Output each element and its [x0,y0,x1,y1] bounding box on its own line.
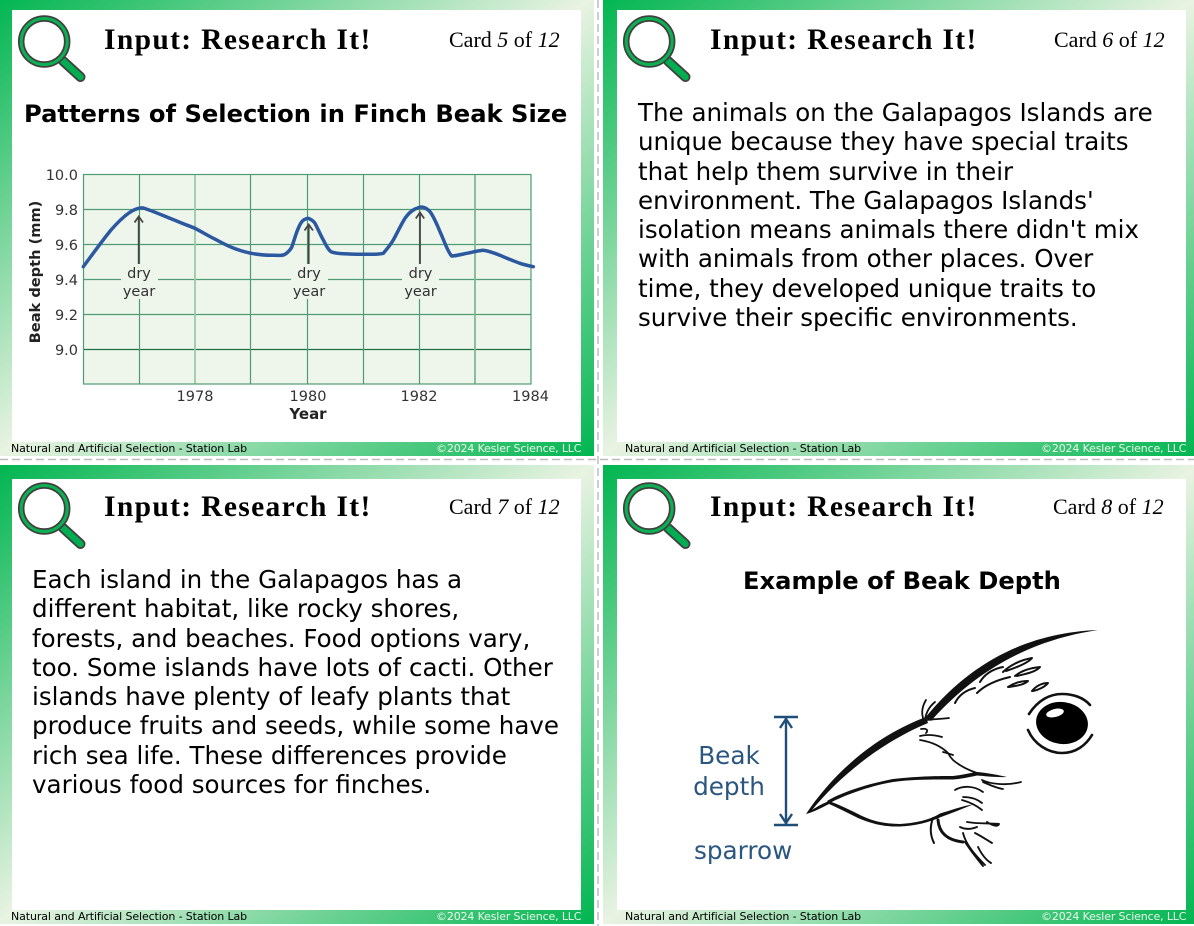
footer right card 6: ©2024 Kesler Science, LLC [1041,442,1186,455]
footer left card 7: Natural and Artificial Selection - Station Lab [11,910,247,923]
dry year labels: dry [127,266,151,282]
heading card 5: Input: Research It! [104,24,372,56]
body text card 7: too. Some islands have lots of cacti. Other [32,653,553,682]
measure labels: sparrow [694,836,792,865]
beak depth measure [774,717,798,825]
card number 5: Card 5 of 12 [449,27,560,52]
dry year label masks [121,264,439,299]
heading card 8: Input: Research It! [710,491,978,523]
body text card 6 [638,98,1153,332]
dry year arrows [134,212,424,264]
dry year labels: year [404,284,437,300]
y axis labels: 9.0 [55,343,78,359]
y axis labels: 10.0 [46,168,78,184]
body text card 7: various food sources for finches. [32,770,431,799]
x axis labels: 1982 [401,389,437,405]
bird feathers [920,658,1048,866]
body text card 7: different habitat, like rocky shores, [32,594,459,623]
body text card 7: produce fruits and seeds, while some have [32,711,559,740]
body text card 7: Each island in the Galapagos has a [32,565,462,594]
diagram title: Example of Beak Depth [743,567,1061,595]
body text card 7: rich sea life. These differences provide [32,740,507,770]
line chart: finch beak depth by year [27,168,549,423]
body text card 7: forests, and beaches. Food options vary, [32,624,530,652]
x axis labels [177,389,549,405]
card number 6: Card 6 of 12 [1054,27,1165,52]
body text card 7 [32,565,559,799]
footer right card 7: ©2024 Kesler Science, LLC [436,910,581,923]
body text card 6: environment. The Galapagos Islands' [638,186,1094,215]
footer left card 6: Natural and Artificial Selection - Station Lab [625,442,861,455]
dry year labels [123,266,437,300]
body text card 6: isolation means animals there didn't mix [638,215,1139,244]
footer left card 8: Natural and Artificial Selection - Station Lab [625,910,861,923]
beak depth curve [83,207,533,267]
panel: card 7 [0,465,594,924]
card number 7: Card 7 of 12 [449,494,560,519]
panel: card 8 [603,465,1194,924]
y axis title: Beak depth (mm) [27,201,44,343]
plot background [84,174,531,384]
x axis labels: 1980 [290,389,326,405]
white card area [617,479,1186,910]
white card area [12,10,581,442]
icon: magnifying glass card 5 [18,15,86,82]
dry year labels: dry [409,266,433,282]
body text card 6: survive their specific environments. [638,303,1078,332]
bird eye [1028,694,1092,753]
measure labels: Beak [698,741,760,770]
dry year labels: year [123,284,155,300]
body text card 6: unique because they have special traits [638,127,1129,156]
measure labels: depth [693,772,765,801]
icon: magnifying glass card 8 [622,482,690,549]
footer right card 5: ©2024 Kesler Science, LLC [436,442,581,455]
x axis labels: 1984 [512,389,549,405]
x axis title: Year [288,405,327,423]
body text card 6: time, they developed unique traits to [638,274,1096,302]
chart title: Patterns of Selection in Finch Beak Size [24,100,567,128]
body text card 6: that help them survive in their [638,156,1013,186]
white card area [617,10,1186,442]
dry year labels: year [293,284,325,300]
y axis labels [46,168,78,359]
white card area [12,479,581,910]
x axis labels: 1978 [177,389,213,405]
body text card 6: The animals on the Galapagos Islands are [638,98,1153,127]
icon: magnifying glass card 6 [622,15,690,82]
body text card 7: islands have plenty of leafy plants that [32,682,510,711]
card number 8: Card 8 of 12 [1053,494,1164,519]
panel: card 6 [603,0,1194,456]
measure labels [693,741,792,865]
y axis labels: 9.8 [55,203,78,219]
footer right card 8: ©2024 Kesler Science, LLC [1041,910,1186,923]
y axis labels: 9.2 [55,308,78,324]
heading card 7: Input: Research It! [104,491,372,523]
footer left card 5: Natural and Artificial Selection - Station Lab [11,442,247,455]
icon: magnifying glass card 7 [18,482,86,549]
panel: card 5 [0,0,594,456]
bird head outline [806,630,1098,827]
dry year labels: dry [297,266,321,282]
y axis labels: 9.4 [55,273,78,289]
body text card 6: with animals from other places. Over [638,244,1093,273]
y axis labels: 9.6 [55,238,78,254]
heading card 6: Input: Research It! [710,24,978,56]
